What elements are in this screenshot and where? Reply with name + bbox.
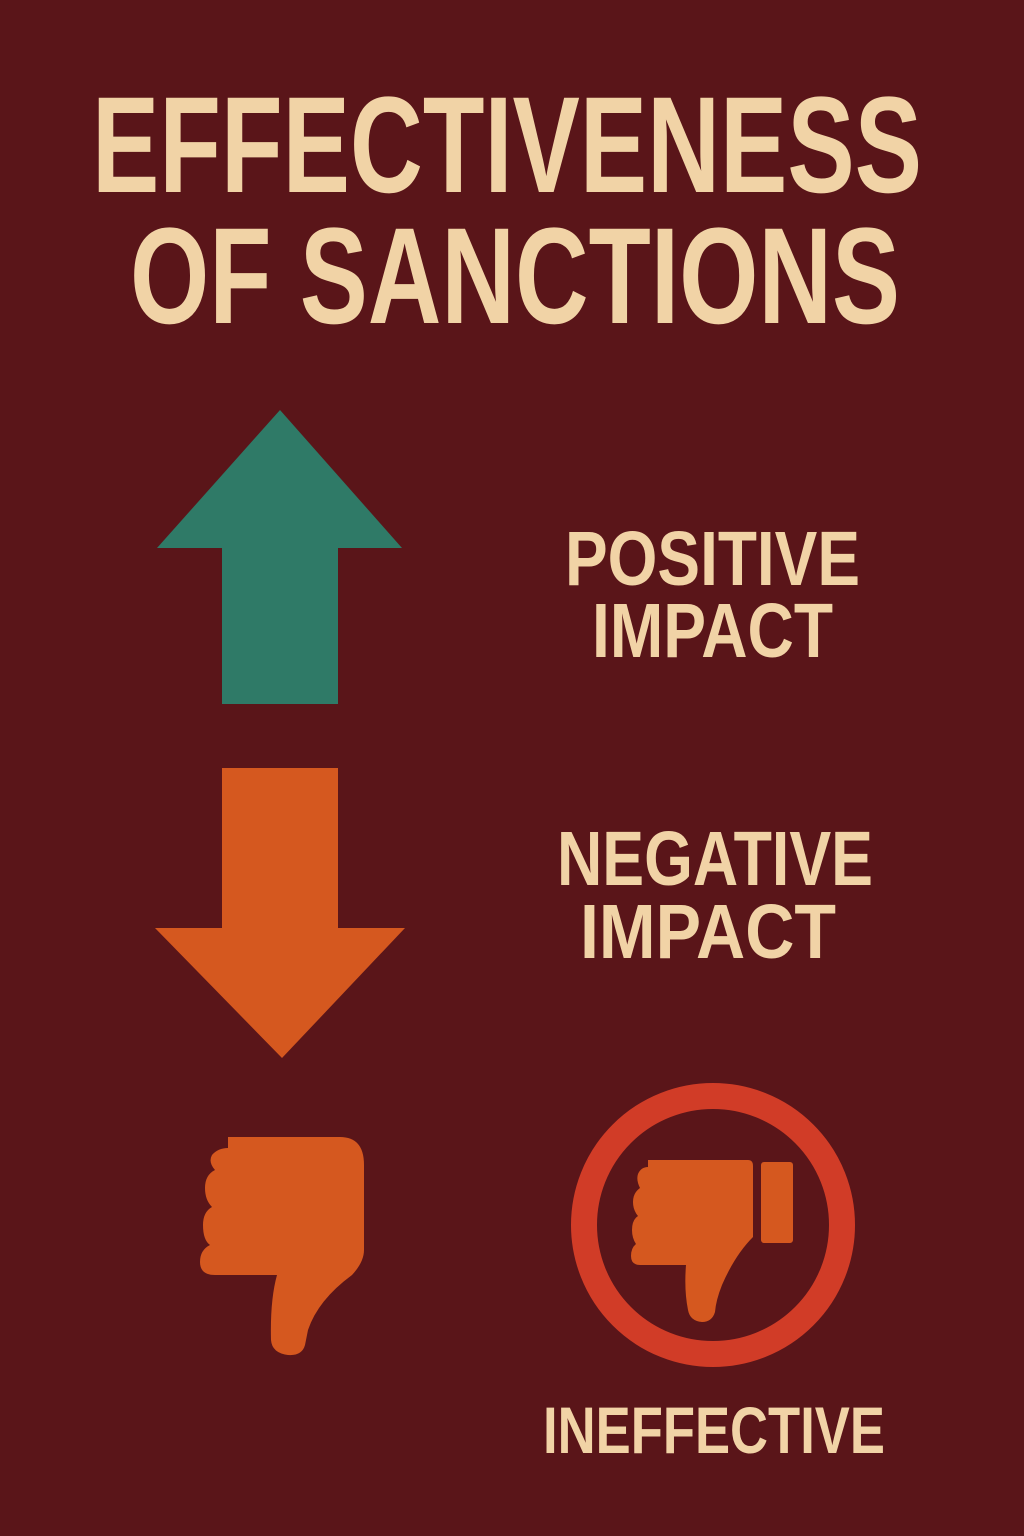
title xyxy=(92,69,922,353)
label: positive impact xyxy=(565,516,860,674)
label: negative impact: NEGATIVE xyxy=(557,816,873,902)
icon: ineffective circle with thumbs down xyxy=(584,1096,842,1354)
label: negative impact xyxy=(557,816,873,975)
label: positive impact: IMPACT xyxy=(592,588,833,674)
icon: thumbs down xyxy=(200,1137,364,1355)
label: negative impact: IMPACT xyxy=(580,889,836,975)
label: positive impact: POSITIVE xyxy=(565,516,860,602)
icon: down arrow (orange) xyxy=(155,768,405,1058)
label: ineffective: INEFFECTIVE xyxy=(543,1393,885,1467)
icon: up arrow (teal) xyxy=(157,410,402,704)
